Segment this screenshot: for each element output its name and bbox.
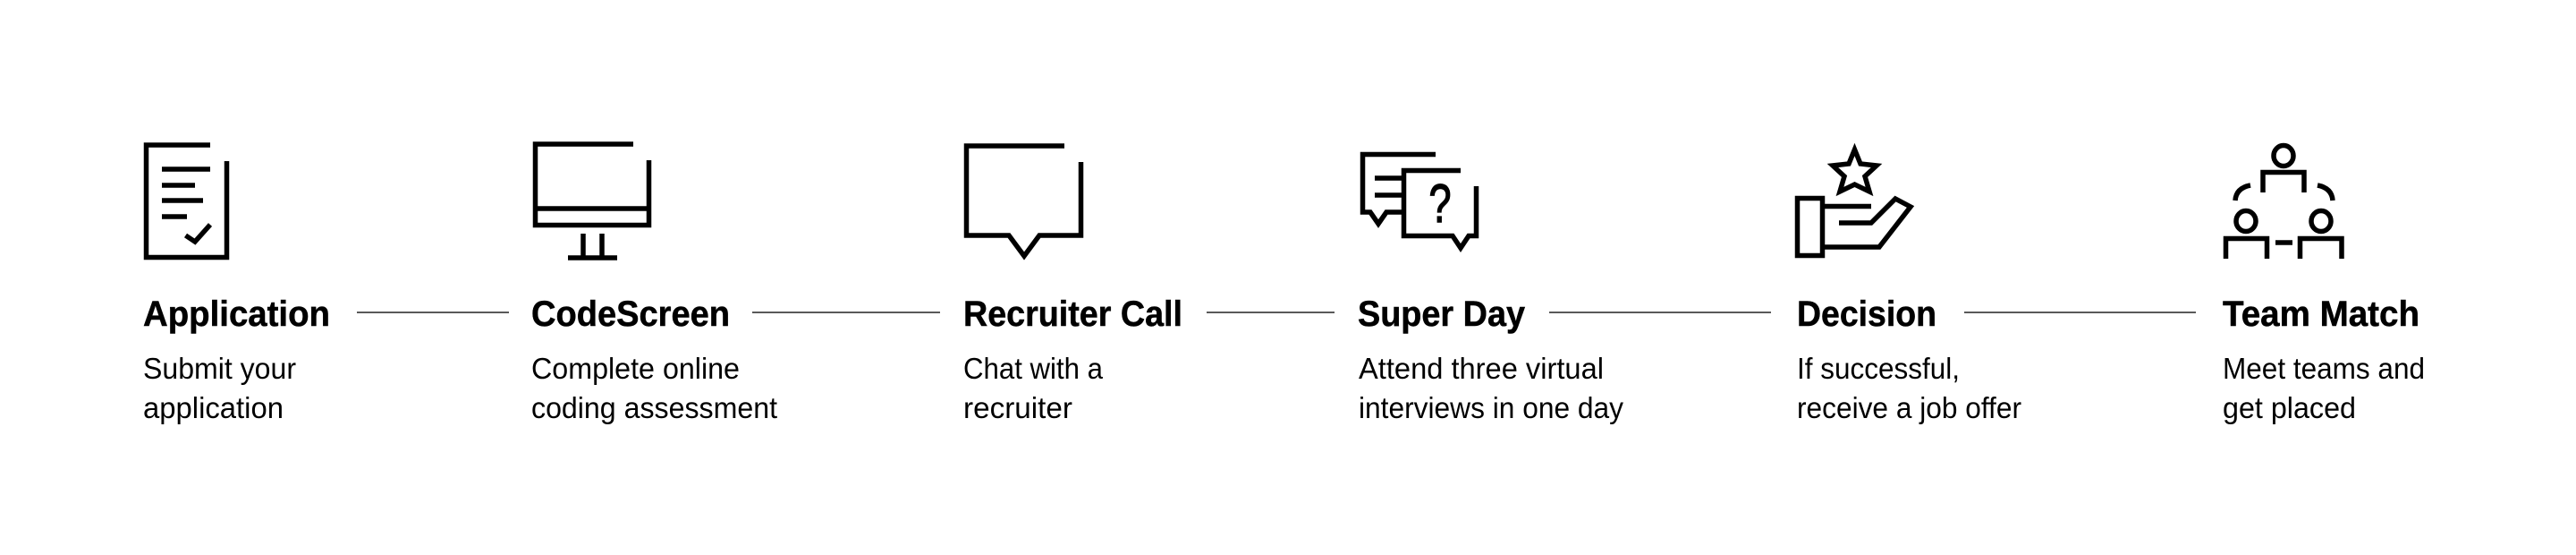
description: CodeScreen: coding assessment bbox=[531, 391, 777, 424]
step: Super Day bbox=[1358, 154, 1623, 424]
heading: Recruiter Call: Recruiter Call bbox=[963, 295, 1182, 334]
description: Application: Submit your bbox=[143, 352, 296, 385]
description: Decision: receive a job offer bbox=[1797, 391, 2021, 424]
description: Super Day: Attend three virtual bbox=[1359, 352, 1604, 385]
step: CodeScreen bbox=[531, 144, 777, 424]
heading: Team Match: Team Match bbox=[2223, 295, 2419, 334]
description: Decision bbox=[1797, 352, 2021, 424]
heading: Application: Application bbox=[143, 295, 330, 334]
icon: desktop monitor bbox=[535, 144, 649, 258]
icon: document with checkmark bbox=[147, 145, 227, 258]
description: Super Day bbox=[1359, 352, 1623, 424]
connector 1 bbox=[357, 312, 509, 313]
connector 3 bbox=[1207, 312, 1335, 313]
connector 5 bbox=[1964, 312, 2196, 313]
description: Recruiter Call bbox=[963, 352, 1104, 424]
heading: CodeScreen: CodeScreen bbox=[531, 295, 730, 334]
heading: Super Day: Super Day bbox=[1358, 295, 1526, 334]
icon: two speech bubbles with question mark: ? bbox=[1429, 174, 1451, 234]
connector 4 bbox=[1549, 312, 1771, 313]
step: Decision bbox=[1797, 149, 2021, 424]
icon: speech bubble bbox=[966, 146, 1080, 256]
description: Application bbox=[143, 352, 296, 424]
description: Recruiter Call: recruiter bbox=[963, 391, 1072, 424]
description: CodeScreen: Complete online bbox=[531, 352, 740, 385]
description: Recruiter Call: Chat with a bbox=[963, 352, 1104, 385]
step: Application bbox=[143, 145, 330, 424]
step: Recruiter Call bbox=[963, 146, 1182, 424]
icon: hand holding star bbox=[1798, 149, 1911, 256]
description: Team Match: get placed bbox=[2223, 391, 2356, 424]
icon: two speech bubbles with question mark bbox=[1363, 154, 1476, 248]
description: Team Match bbox=[2223, 352, 2425, 424]
description: Decision: If successful, bbox=[1797, 352, 1960, 385]
heading: Decision: Decision bbox=[1797, 295, 1936, 334]
description: CodeScreen bbox=[531, 352, 777, 424]
step: Team Match bbox=[2223, 145, 2425, 424]
description: Application: application bbox=[143, 391, 284, 424]
connector 2 bbox=[752, 312, 940, 313]
description: Super Day: interviews in one day bbox=[1359, 391, 1623, 424]
icon: three connected people bbox=[2225, 145, 2342, 259]
description: Team Match: Meet teams and bbox=[2223, 352, 2425, 385]
